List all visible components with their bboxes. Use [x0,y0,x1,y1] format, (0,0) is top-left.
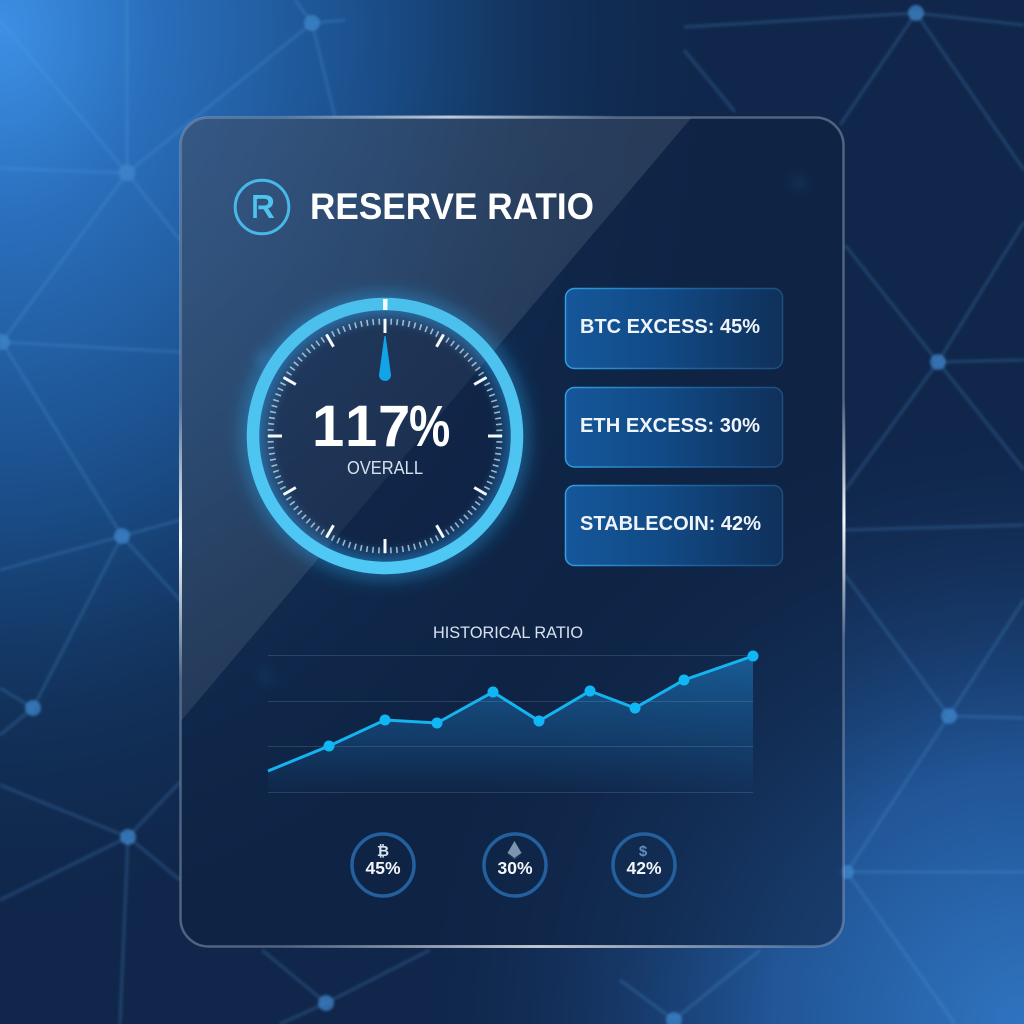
gauge needle [379,336,391,381]
gauge label: OVERALL [347,458,423,478]
badge: stablecoin: $ [639,843,648,860]
badge: BTC [352,834,414,896]
chart heading: HISTORICAL RATIO [433,624,583,642]
gauge value: % [409,394,450,459]
stat card: stablecoin: STABLECOIN: 42% [580,512,761,535]
gauge [251,299,519,570]
icon: logo: R [251,188,275,225]
badge: stablecoin [613,834,675,896]
icon: logo [235,180,289,234]
stat card: ETH [566,388,782,467]
badge: BTC: 45% [366,858,401,878]
gauge value: 117 [312,394,410,459]
stat card: ETH: ETH EXCESS: 30% [580,414,760,437]
badge: ETH: 30% [498,858,533,878]
title: RESERVE RATIO [310,186,594,227]
line chart [268,650,758,792]
panel: glass card [179,116,846,948]
badge: ETH [484,834,546,896]
stat card: BTC: BTC EXCESS: 45% [580,315,760,338]
stat card: BTC [566,288,782,368]
badge: stablecoin: 42% [626,858,662,878]
stat card: stablecoin [566,486,782,566]
badge: BTC: ₿ [377,843,389,860]
